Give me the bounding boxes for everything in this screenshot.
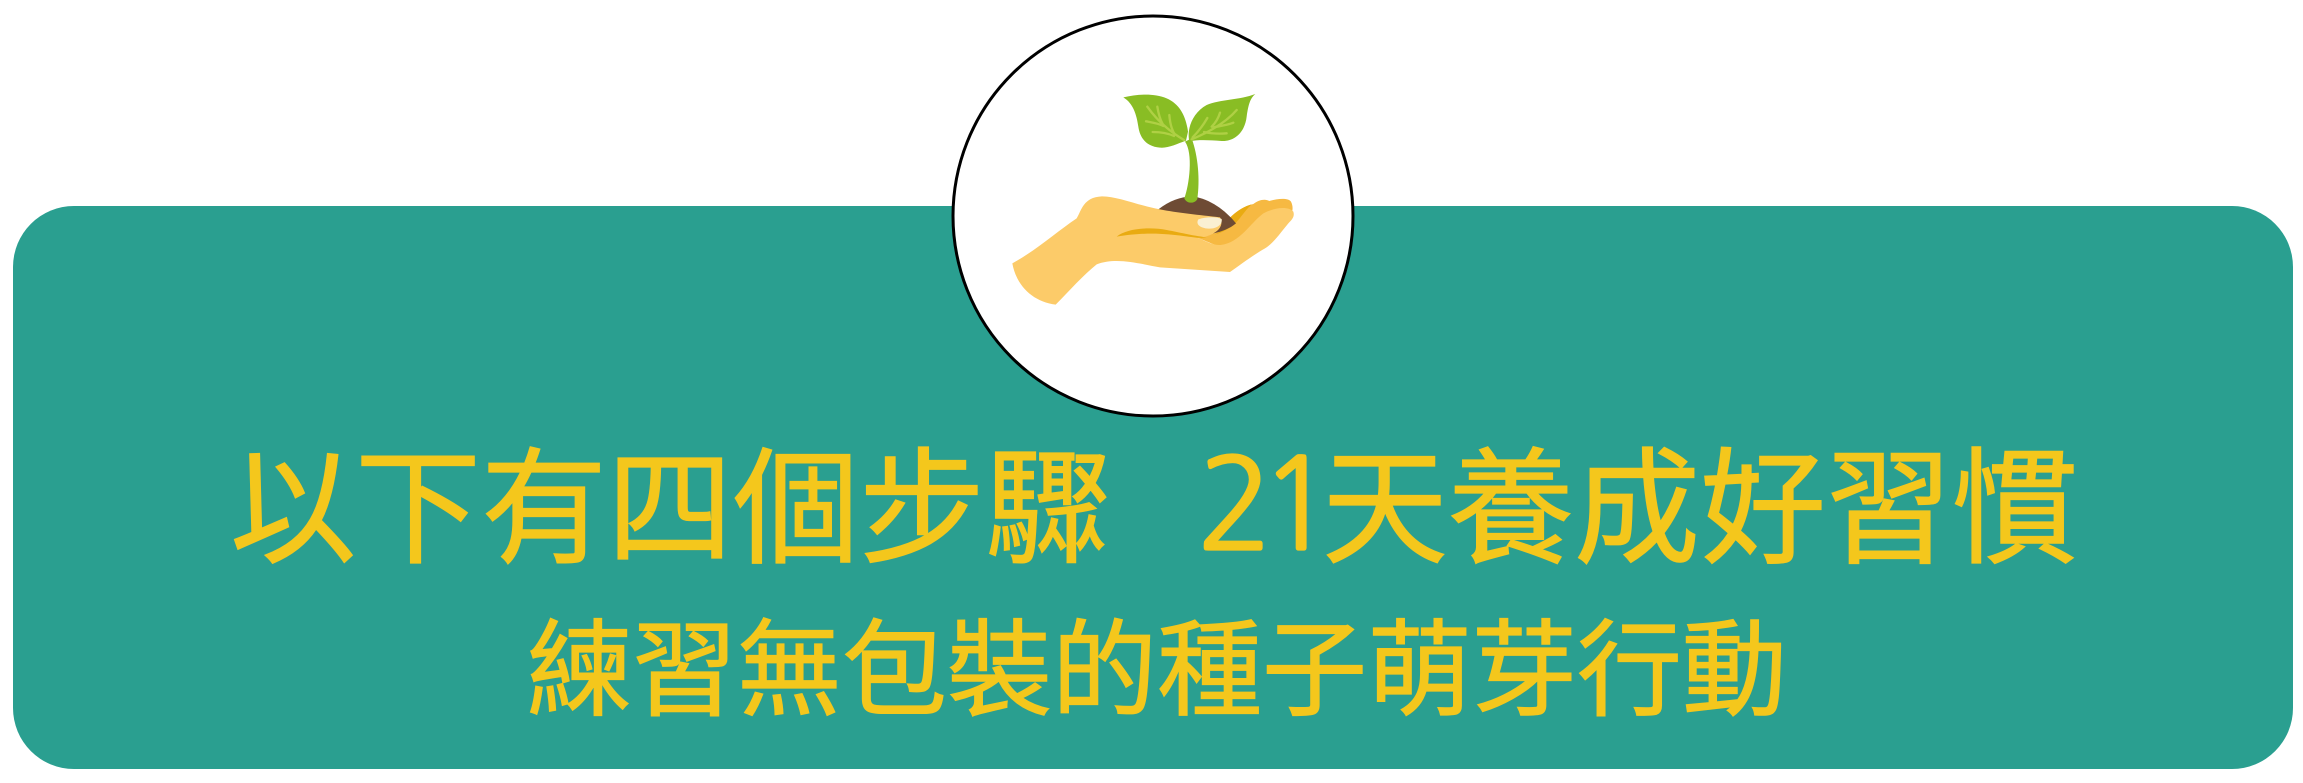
back fingers: [1198, 199, 1293, 248]
palm and thumb: [1012, 196, 1294, 305]
badge circle: [953, 16, 1353, 416]
heading: four steps, 21 days: 天養成好習慣: [1322, 439, 2078, 580]
leaf veins: [1146, 107, 1237, 140]
left leaf: [1123, 95, 1188, 148]
icon: circle badge with hand and seedling: [953, 16, 1353, 416]
palm crease: [1117, 228, 1207, 238]
stem: [1184, 138, 1199, 203]
illustration: hand holding seedling: [1012, 94, 1294, 305]
thumbnail: [1197, 217, 1222, 229]
heading: four steps, 21 days: 21: [1197, 442, 1335, 568]
panel: teal rounded background: [13, 206, 2293, 769]
right leaf: [1189, 94, 1255, 141]
heading: four steps, 21 days: 以下有四個步驟: [230, 439, 1111, 580]
subheading: seed sprouting action: 練習無包裝的種子萌芽行動: [527, 613, 1787, 730]
soil: [1158, 197, 1236, 233]
